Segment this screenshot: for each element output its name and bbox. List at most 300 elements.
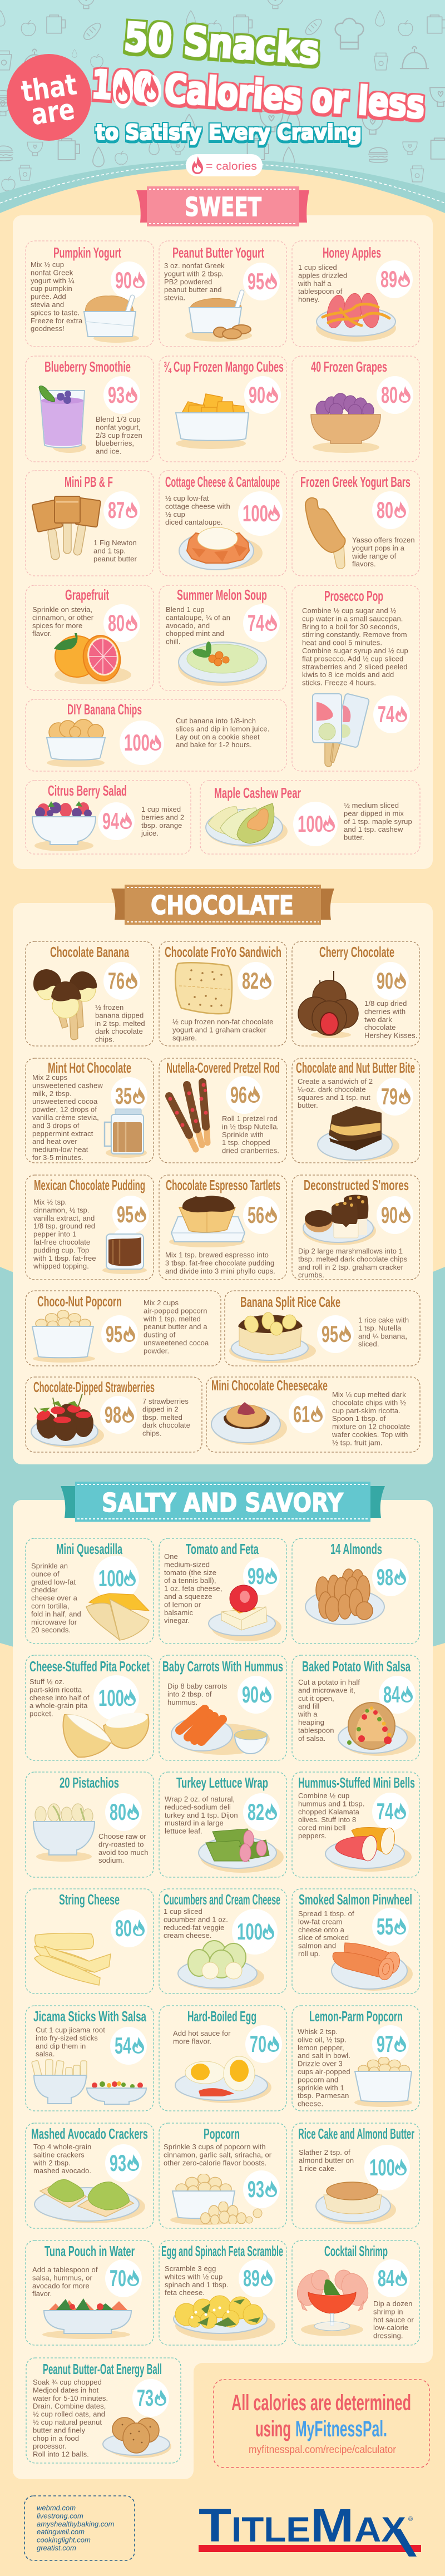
icon: jicama sticks and salsa xyxy=(32,2060,146,2104)
description: hot sauce or xyxy=(373,2316,414,2324)
description: in ½ tbsp Nutella. xyxy=(222,1122,279,1131)
title: Mexican Chocolate Pudding xyxy=(34,1177,145,1193)
description: 1 cup mixed xyxy=(141,805,181,813)
icon: rice cake with almond butter xyxy=(316,2182,396,2224)
description: chocolate xyxy=(364,1023,396,1032)
description: Mix 2 cups xyxy=(32,1073,68,1082)
description: mashed avocado. xyxy=(33,2167,91,2175)
calorie badge xyxy=(372,1793,409,1830)
description: popcorn and xyxy=(298,2075,338,2084)
description: pear dipped in mix xyxy=(344,809,404,817)
description: of lemon or xyxy=(164,1600,201,1608)
description: processor. xyxy=(33,2442,67,2450)
description: microwave for xyxy=(31,1618,77,1626)
calorie badge xyxy=(111,1077,147,1115)
title: Peanut Butter Yogurt xyxy=(172,244,264,261)
calorie badge: 100 xyxy=(98,1565,124,1591)
calorie badge xyxy=(101,1315,138,1353)
calorie badge: 100 xyxy=(237,1918,263,1945)
description: Scramble 3 egg xyxy=(165,2264,216,2273)
description: tablespoon xyxy=(298,1726,334,1734)
description: dressing. xyxy=(373,2332,403,2340)
card: Mini PB & F xyxy=(26,471,154,576)
card: Banana Split Rice Cake xyxy=(225,1291,420,1366)
logo: TitleMax: M xyxy=(310,2499,354,2552)
description: vinegar. xyxy=(164,1616,190,1625)
icon: cucumbers and cream cheese xyxy=(178,1941,264,1990)
description: olives. Stuff into 8 xyxy=(298,1815,356,1824)
icon: bowl of berries xyxy=(32,801,96,851)
description: lemon pepper, xyxy=(298,2044,344,2052)
description: Sprinkle an xyxy=(31,1562,68,1570)
calorie badge xyxy=(110,2027,147,2065)
description: ½ cup low-fat xyxy=(165,494,209,502)
title: Egg and Spinach Feta Scramble xyxy=(161,2243,283,2259)
description: butter. xyxy=(298,1101,318,1109)
description: dry-roasted to xyxy=(98,1840,144,1848)
description: sprinkle with 1 xyxy=(298,2084,344,2092)
description: 1/8 tsp. ground red xyxy=(33,1222,95,1230)
description: butter and finely xyxy=(33,2426,86,2434)
description: part-skim ricotta xyxy=(29,1685,82,1694)
description: Dip 8 baby carrots xyxy=(167,1682,228,1690)
description: stevia. xyxy=(164,294,185,302)
card: Egg and Spinach Feta Scramble xyxy=(159,2241,286,2345)
description: flavors. xyxy=(352,560,376,568)
description: One xyxy=(164,1552,178,1561)
description: cinnamon, garlic salt, sriracha, or xyxy=(164,2150,272,2159)
note: calories determined using MyFitnessPal: myfitnesspal.com/recipe/calculator xyxy=(249,2444,397,2456)
title: Chocolate-Dipped Strawberries xyxy=(33,1379,155,1395)
title xyxy=(7,13,426,145)
card: Deconstructed S'mores xyxy=(292,1175,419,1280)
calorie badge: 82 xyxy=(248,1799,264,1825)
description: 1 cup sliced xyxy=(298,263,337,272)
circle: that are: are xyxy=(29,93,77,132)
note: calories determined using MyFitnessPal xyxy=(214,2380,429,2468)
description: Sprinkle 3 cups of popcorn with xyxy=(164,2143,266,2151)
calorie badge xyxy=(238,962,274,1000)
description: tbsp. orange xyxy=(141,821,182,830)
title: Choco-Nut Popcorn xyxy=(37,1293,122,1310)
icon: bowl of pistachios xyxy=(33,1804,95,1862)
icon: chocolate-dipped strawberries xyxy=(31,1394,104,1448)
description: a whole-grain pita xyxy=(29,1701,88,1710)
calorie badge xyxy=(238,491,283,536)
description: Create a sandwich of 2 xyxy=(298,1077,373,1085)
description: cherries with xyxy=(364,1007,406,1015)
card: Mini Chocolate Cheesecake xyxy=(206,1377,420,1452)
title: Turkey Lettuce Wrap xyxy=(176,1774,268,1791)
calorie badge: 54 xyxy=(115,2032,131,2059)
description: Dip a dozen xyxy=(373,2299,412,2308)
ribbon: Salty and Savory: SALTY AND SAVORY xyxy=(102,1488,344,1518)
card: Turkey Lettuce Wrap xyxy=(159,1772,286,1877)
calorie badge xyxy=(238,1676,274,1714)
calorie badge xyxy=(232,1909,278,1955)
title: Peanut Butter-Oat Energy Ball xyxy=(43,2361,162,2377)
description: ½ cup xyxy=(165,510,185,519)
calorie badge: 89 xyxy=(380,266,397,292)
description: vanilla extract, and xyxy=(33,1214,95,1222)
description: apples drizzled xyxy=(298,271,347,279)
description: squares and 1 tsp. nut xyxy=(298,1093,370,1102)
description: and 3 drops of xyxy=(32,1121,80,1129)
title: Tomato and Feta xyxy=(186,1541,259,1557)
description: and salt in bowl. xyxy=(298,2051,350,2060)
card: Cottage Cheese & Cantaloupe xyxy=(159,471,286,576)
description: 2/3 cup frozen xyxy=(96,431,142,440)
calorie badge: 70 xyxy=(110,2265,126,2291)
description: with half a xyxy=(298,279,332,288)
icon: grapefruit xyxy=(54,633,131,684)
calorie badge: 74 xyxy=(377,1798,393,1824)
description: unsweetened cocoa xyxy=(144,1339,209,1347)
description: wafer cookies. Top with xyxy=(332,1430,408,1439)
description: juice. xyxy=(141,829,159,837)
description: in 2 tsp. melted xyxy=(95,1019,145,1028)
card: Popcorn xyxy=(159,2123,286,2228)
description: cheddar xyxy=(31,1586,58,1594)
description: 1 rice cake with xyxy=(358,1316,409,1324)
description: Medjool dates in hot xyxy=(33,2386,99,2394)
description: dried cranberries. xyxy=(222,1147,279,1155)
calorie badge xyxy=(132,2379,169,2417)
description: cinnamon, or other xyxy=(32,613,94,621)
description: avocado for more xyxy=(32,2282,90,2290)
description: medium-sized xyxy=(164,1560,210,1568)
description: Mix 2 cups xyxy=(144,1299,179,1307)
calorie badge: 76 xyxy=(108,968,125,994)
icon: tuna bowl xyxy=(42,2298,131,2339)
icon: carrots and hummus xyxy=(171,1709,270,1755)
icon: smoked salmon pinwheels xyxy=(332,1943,413,1991)
card: Pumpkin Yogurt xyxy=(26,241,154,347)
calorie badge: 98 xyxy=(377,1564,393,1590)
calorie badge xyxy=(103,376,140,414)
calorie badge: 56 xyxy=(248,1202,264,1228)
title: String Cheese xyxy=(59,1891,120,1908)
description: cup pumpkin xyxy=(31,284,72,293)
calorie badge: 98 xyxy=(105,1401,121,1428)
description: Cut banana into 1/8-inch xyxy=(176,717,256,725)
description: yogurt with 2 tbsp. xyxy=(164,269,224,278)
description: pocket. xyxy=(29,1710,53,1718)
description: diced cantaloupe. xyxy=(165,518,223,526)
calorie badge xyxy=(226,1076,263,1114)
description: peanut butter and xyxy=(164,285,222,294)
calorie badge xyxy=(93,1675,139,1721)
icon: peanut butter yogurt cup xyxy=(185,292,252,342)
calorie badge: 95 xyxy=(106,1321,122,1347)
description: reduced-sodium deli xyxy=(165,1803,231,1811)
description: Spoon 1 tbsp. of xyxy=(332,1414,386,1423)
description: spices to taste. xyxy=(31,308,80,317)
description: with a xyxy=(298,1710,318,1719)
description: and ice. xyxy=(96,447,121,456)
calorie badge: 94 xyxy=(102,808,119,834)
icon: turkey lettuce wraps xyxy=(199,1829,284,1873)
description: Dip 2 large marshmallows into 1 xyxy=(298,1247,403,1255)
card: Lemon-Parm Popcorn xyxy=(292,2006,419,2111)
icon: melon soup bowl xyxy=(178,641,267,686)
description: Hershey Kisses. xyxy=(364,1032,417,1040)
calorie badge: 90 xyxy=(377,968,393,994)
description: cheese onto a xyxy=(298,1926,345,1934)
panel: salty and savory xyxy=(13,1482,433,2479)
card: Peanut Butter Yogurt xyxy=(159,241,286,347)
card: Chocolate and Nut Butter Bite xyxy=(292,1058,419,1163)
description: slice of smoked xyxy=(298,1933,349,1942)
logo: TitleMax xyxy=(199,2499,421,2557)
description: salsa. xyxy=(36,2050,55,2058)
description: hummus. xyxy=(167,1698,197,1706)
card: Frozen Mango Cubes xyxy=(159,356,286,462)
title: Pumpkin Yogurt xyxy=(53,244,121,261)
calorie badge: 87 xyxy=(108,497,125,523)
sources xyxy=(24,2496,135,2560)
title: Citrus Berry Salad xyxy=(48,782,127,799)
title: Maple Cashew Pear xyxy=(214,784,301,801)
description: two dark xyxy=(364,1015,392,1024)
ribbon: Sweet xyxy=(136,186,309,226)
calorie badge xyxy=(105,2259,142,2297)
calorie badge: 95 xyxy=(117,1201,134,1227)
calorie badge: 99 xyxy=(248,1563,264,1589)
calorie badge: 100 xyxy=(369,2154,395,2180)
calorie badge xyxy=(372,962,409,1000)
calorie badge xyxy=(243,2170,280,2208)
calorie badge: 70 xyxy=(250,2031,266,2057)
description: 1 oz. feta cheese, xyxy=(164,1585,222,1593)
calorie badge: 79 xyxy=(381,1083,398,1109)
description: ½ cup frozen non-fat chocolate xyxy=(172,1018,274,1026)
description: peppers. xyxy=(298,1832,327,1840)
card: Rice Cake and Almond Butter xyxy=(292,2123,419,2228)
icon: quesadilla xyxy=(86,1593,149,1640)
calorie badge: 100 xyxy=(298,811,323,837)
calorie badge xyxy=(376,260,413,298)
description: butter. xyxy=(344,833,364,842)
description: powder. xyxy=(144,1346,169,1355)
calorie badge: 80 xyxy=(377,497,393,523)
description: peanut butter and a xyxy=(144,1322,207,1331)
description: dark chocolate xyxy=(95,1027,143,1035)
icon: egg and spinach scramble xyxy=(174,2296,275,2341)
icon: chocolate cherries xyxy=(298,971,358,1038)
description: corn tortilla, xyxy=(31,1602,70,1610)
description: Combine ½ cup sugar and ½ xyxy=(302,606,396,615)
description: with 2 tbsp. xyxy=(33,2159,71,2167)
description: cup water in a small saucepan. xyxy=(302,614,403,623)
description: Mix 1 tsp. brewed espresso into xyxy=(165,1251,269,1259)
description: flavor. xyxy=(32,2289,52,2298)
calorie badge: 84 xyxy=(383,1681,400,1708)
note: calories determined using MyFitnessPal: using xyxy=(255,2417,291,2441)
description: 1 Fig Newton xyxy=(93,539,137,547)
card: Mexican Chocolate Pudding xyxy=(26,1175,154,1280)
calorie badge xyxy=(317,1315,354,1353)
title: Banana Split Rice Cake xyxy=(240,1294,340,1310)
title: Mini PB & F xyxy=(65,473,113,490)
icon: graham cracker xyxy=(175,963,232,1014)
title: Cottage Cheese & Cantaloupe xyxy=(165,473,280,490)
title: Mini Chocolate Cheesecake xyxy=(211,1377,328,1394)
card: Hard-Boiled Egg xyxy=(159,2006,286,2111)
title: Blueberry Smoothie xyxy=(44,358,131,375)
calorie badge xyxy=(112,1196,149,1233)
description: square. xyxy=(172,1034,197,1042)
note: calories determined using MyFitnessPal: MyFitnessPal. xyxy=(295,2417,387,2441)
description: sliced. xyxy=(358,1340,379,1348)
calorie badge xyxy=(111,1909,147,1947)
calorie badge: 100 xyxy=(124,729,150,756)
logo: TitleMax: ® xyxy=(408,2516,413,2523)
description: turkey and 1 tsp. Dijon xyxy=(165,1811,238,1819)
icon: bowl of grapes xyxy=(311,393,380,453)
description: more flavor. xyxy=(173,2037,211,2045)
calorie badge xyxy=(372,491,409,529)
card: Mashed Avocado Crackers xyxy=(26,2123,154,2228)
title: Hard-Boiled Egg xyxy=(187,2008,256,2025)
description: flat prosecco. Add ½ cup sliced xyxy=(302,654,403,663)
description: 20 seconds. xyxy=(31,1626,71,1634)
description: Mix ¼ cup melted dark xyxy=(332,1390,406,1399)
description: Combine ½ cup xyxy=(298,1792,349,1800)
description: other zero-calorie flavor boosts. xyxy=(164,2159,266,2167)
circle: that are: that xyxy=(19,68,79,109)
description: salmon and xyxy=(298,1942,336,1950)
title: Baby Carrots With Hummus xyxy=(162,1658,283,1675)
description: cream cheese. xyxy=(164,1931,212,1940)
calorie badge: 82 xyxy=(242,968,259,994)
icon: shrimp cocktail xyxy=(292,2269,373,2336)
description: shrimp in xyxy=(373,2307,403,2316)
card: Nutella-Covered Pretzel Rod xyxy=(159,1058,286,1163)
description: 1 tsp. Nutella xyxy=(358,1324,402,1332)
calorie badge: 80 xyxy=(108,610,125,636)
description: tbsp. melted xyxy=(142,1413,182,1422)
description: Spread 1 tbsp. of xyxy=(298,1909,354,1918)
icon: chocolate and nut butter sandwich xyxy=(318,1106,399,1161)
description: Mix ½ tsp. xyxy=(33,1198,67,1206)
description: Bring to a boil for 30 seconds, xyxy=(302,623,399,631)
description: milk, 2 tbsp. xyxy=(32,1089,72,1098)
card: Cocktail Shrimp xyxy=(292,2241,419,2345)
calorie badge: 95 xyxy=(248,268,264,294)
calorie badge xyxy=(377,1196,413,1234)
calorie badge: 97 xyxy=(377,2031,393,2057)
title: Cocktail Shrimp xyxy=(324,2243,388,2259)
description: sticks. Freeze 4 hours. xyxy=(302,679,376,687)
description: Sprinkle on stevia, xyxy=(32,605,92,614)
description: chopped Kalamata xyxy=(298,1808,360,1816)
description: chopped mint and xyxy=(166,629,224,638)
calorie badge xyxy=(120,721,164,765)
description: Drain. Combine dates, xyxy=(33,2402,106,2410)
description: and dip them in xyxy=(36,2042,86,2050)
pattern of food icons xyxy=(0,0,445,191)
calorie badge: 74 xyxy=(378,701,394,727)
card: String Cheese xyxy=(26,1889,154,1993)
description: ½ medium sliced xyxy=(344,801,399,810)
description: vanilla crème stevia, xyxy=(32,1113,99,1122)
description: berries and 2 xyxy=(141,813,184,821)
description: chips. xyxy=(142,1429,162,1438)
card: Cucumbers and Cream Cheese xyxy=(159,1889,286,1993)
description: ½ tsp. fruit jam. xyxy=(332,1438,383,1447)
description: banana dipped xyxy=(95,1011,144,1019)
icon: stuffed mini bell peppers xyxy=(325,1827,412,1872)
icon: almonds on plate xyxy=(305,1569,384,1625)
description: spinach and 1 tbsp. xyxy=(165,2281,229,2289)
calorie badge xyxy=(111,261,147,299)
icon: blueberry smoothie glass xyxy=(39,386,86,453)
description: sodium. xyxy=(98,1856,124,1864)
description: ounce of xyxy=(31,1570,60,1578)
title line: to Satisfy Every Craving: to Satisfy Every Craving xyxy=(96,120,362,145)
sources: livestrong.com xyxy=(37,2511,83,2520)
calorie badge xyxy=(239,2259,275,2297)
calorie badge: 35 xyxy=(115,1083,132,1109)
description: Wrap 2 oz. of natural, xyxy=(165,1795,235,1803)
card: Cheese-Stuffed Pita Pocket xyxy=(26,1655,154,1760)
card: Hummus-Stuffed Mini Bells xyxy=(292,1772,419,1877)
description: water for 5-10 minutes. xyxy=(32,2394,108,2402)
icon: honey apples on plate xyxy=(316,292,396,342)
description: Sprinkle with xyxy=(222,1131,264,1139)
card: Blueberry Smoothie xyxy=(26,356,154,462)
description: Roll 1 pretzel rod xyxy=(222,1114,278,1123)
icon: frozen yogurt bar xyxy=(305,498,345,569)
description: chips. xyxy=(95,1035,115,1044)
description: cucumber and 1 oz. xyxy=(164,1915,228,1923)
title: Prosecco Pop xyxy=(324,588,383,604)
description: tbsp. Parmesan xyxy=(298,2091,349,2100)
description: Cut a potato in half xyxy=(298,1678,360,1686)
arc band xyxy=(0,160,445,1676)
description: crumbs. xyxy=(298,1271,324,1279)
icon: fig newton pops xyxy=(32,496,101,560)
calorie badge: 100 xyxy=(98,1685,124,1711)
description: stirring constantly. Remove from xyxy=(302,630,407,639)
calorie badge xyxy=(372,2025,409,2063)
description: Yasso offers frozen xyxy=(352,536,415,544)
description: dipped in 2 xyxy=(142,1405,179,1413)
description: pepper into 1 xyxy=(33,1230,76,1238)
description: and divide into 3 mini phyllo cups. xyxy=(165,1267,275,1275)
calorie badge xyxy=(98,802,135,840)
description: Freeze for extra xyxy=(31,317,83,325)
title: Cucumbers and Cream Cheese xyxy=(164,1891,280,1908)
calorie badge xyxy=(379,1676,416,1714)
description: peppermint extract xyxy=(32,1129,93,1138)
calorie badge: 93 xyxy=(110,2150,126,2176)
circle: that are xyxy=(7,54,91,141)
description: low-fat cream xyxy=(298,1917,342,1926)
title: Mini Quesadilla xyxy=(56,1541,122,1557)
icon: s'mores on plate xyxy=(303,1195,376,1245)
description: chocolate chips with ½ xyxy=(332,1398,406,1407)
title: Grapefruit xyxy=(65,586,109,603)
calorie badge xyxy=(289,1395,325,1433)
description: Blend 1 cup xyxy=(166,605,205,614)
description: wide range of xyxy=(352,552,397,560)
description: Top 4 whole-grain xyxy=(33,2143,91,2151)
description: Lay out on a cookie sheet xyxy=(176,733,260,741)
title: Jicama Sticks With Salsa xyxy=(33,2008,146,2025)
description: and roll in 2 tsp. graham cracker xyxy=(298,1263,404,1271)
